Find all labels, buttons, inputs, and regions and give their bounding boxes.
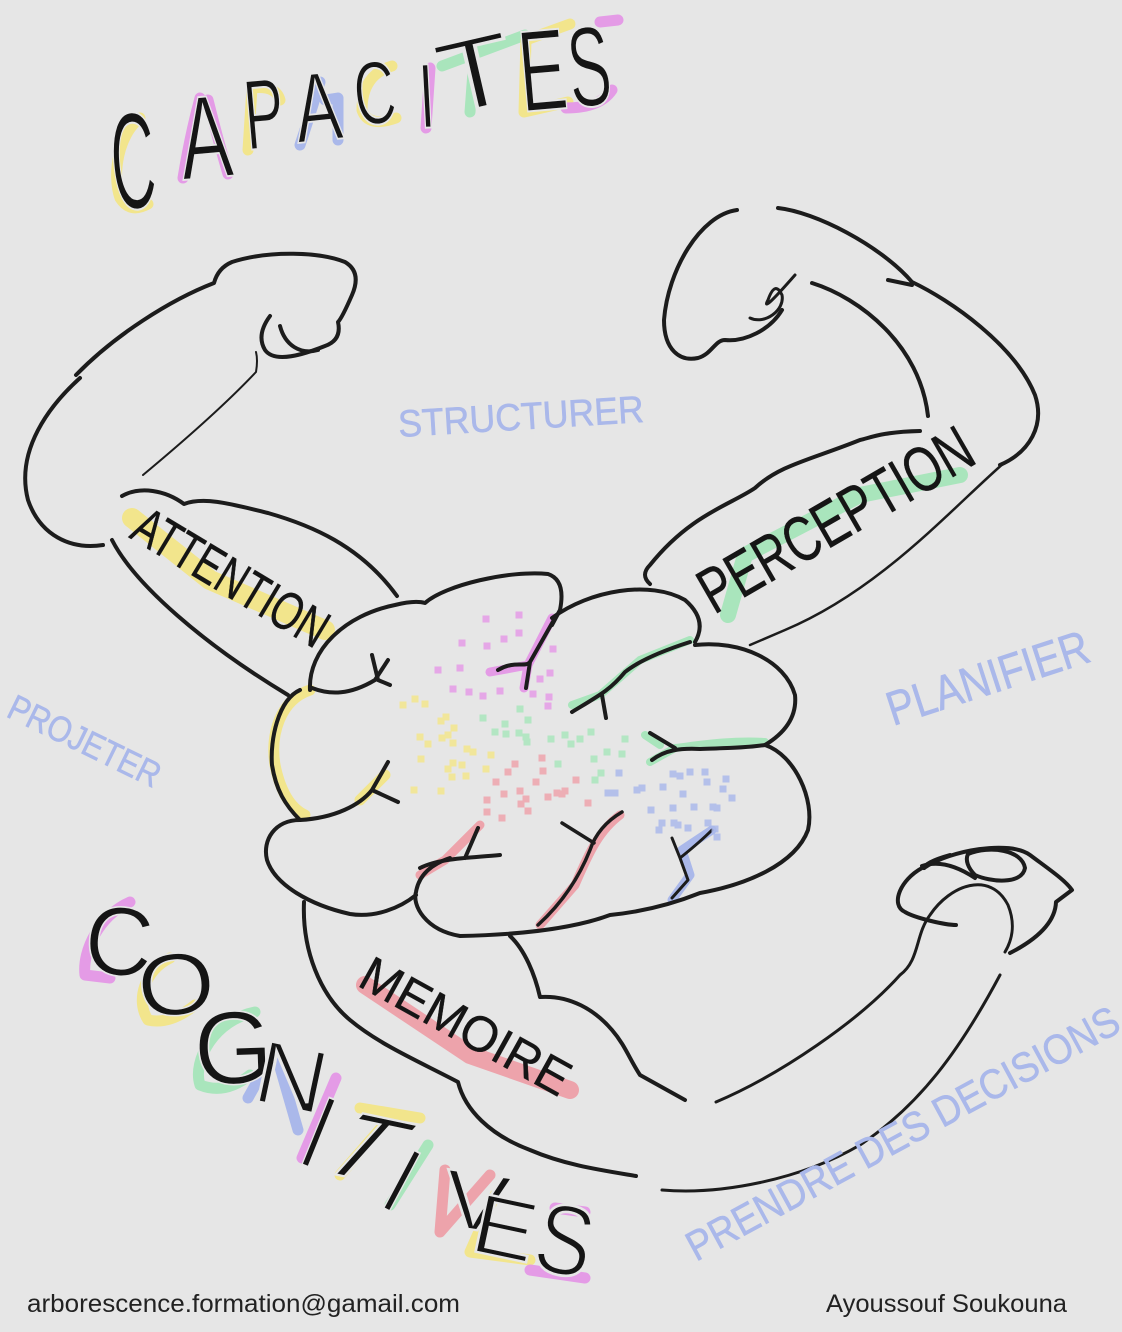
label: ATTENTION: [122, 496, 340, 660]
label: PERCEPTION: [685, 412, 986, 627]
title: COGNITIVES: I: [288, 1074, 350, 1190]
title: CAPACITES: T: [425, 10, 525, 138]
label: ATTENTION: ATTENTION: [122, 496, 340, 660]
left arm: attention: [25, 254, 397, 695]
yellow dots: [403, 699, 491, 791]
title: CAPACITES: S: [561, 1, 617, 133]
cognitives colour highlights: [85, 902, 585, 1278]
attention highlight: [132, 518, 325, 630]
green dots: [483, 709, 625, 780]
title: CAPACITES: A: [174, 70, 237, 206]
title: CAPACITES: A: [289, 51, 347, 165]
brain outline: [266, 573, 809, 936]
footer: email: arborescence.formation@gamail.com: [27, 1290, 460, 1318]
title: COGNITIVES: E: [464, 1175, 546, 1282]
label: PERCEPTION: PERCEPTION: [685, 412, 986, 627]
red dots: [487, 758, 588, 818]
title: COGNITIVES: C: [80, 885, 158, 999]
footer: author: Ayoussouf Soukouna: [826, 1290, 1067, 1318]
title: CAPACITES: C: [349, 41, 401, 146]
brain: [266, 573, 809, 936]
title: COGNITIVES: O: [133, 932, 219, 1037]
blue dots: [608, 772, 732, 837]
right arm: perception: [645, 208, 1038, 645]
pink dots: [438, 615, 553, 706]
title: CAPACITES: C: [105, 82, 161, 240]
title: COGNITIVES: I: [368, 1129, 436, 1232]
icon: lower fist: [898, 848, 1072, 953]
label: MEMOIRE: MEMOIRE: [351, 946, 581, 1107]
title: COGNITIVES: G: [192, 988, 275, 1107]
brain highlights: [274, 618, 765, 925]
title: CAPACITES: [105, 1, 618, 240]
word: STRUCTURER: STRUCTURER: [397, 389, 645, 446]
title: COGNITIVES: S: [526, 1179, 604, 1301]
title colour highlights: [117, 20, 618, 208]
title: COGNITIVES: T: [294, 1096, 435, 1200]
title: COGNITIVES: N: [246, 1021, 337, 1134]
title: CAPACITES: E: [513, 5, 572, 137]
title: COGNITIVES: [80, 885, 604, 1301]
word: PROJETER: PROJETER: [1, 686, 168, 796]
title: CAPACITES: I: [416, 46, 438, 148]
lower arm: memoire: [304, 885, 1012, 1191]
title: COGNITIVES: V: [437, 1152, 515, 1252]
title: CAPACITES: P: [239, 57, 289, 172]
perception highlight: [728, 475, 960, 615]
memoire highlight: [365, 985, 570, 1090]
